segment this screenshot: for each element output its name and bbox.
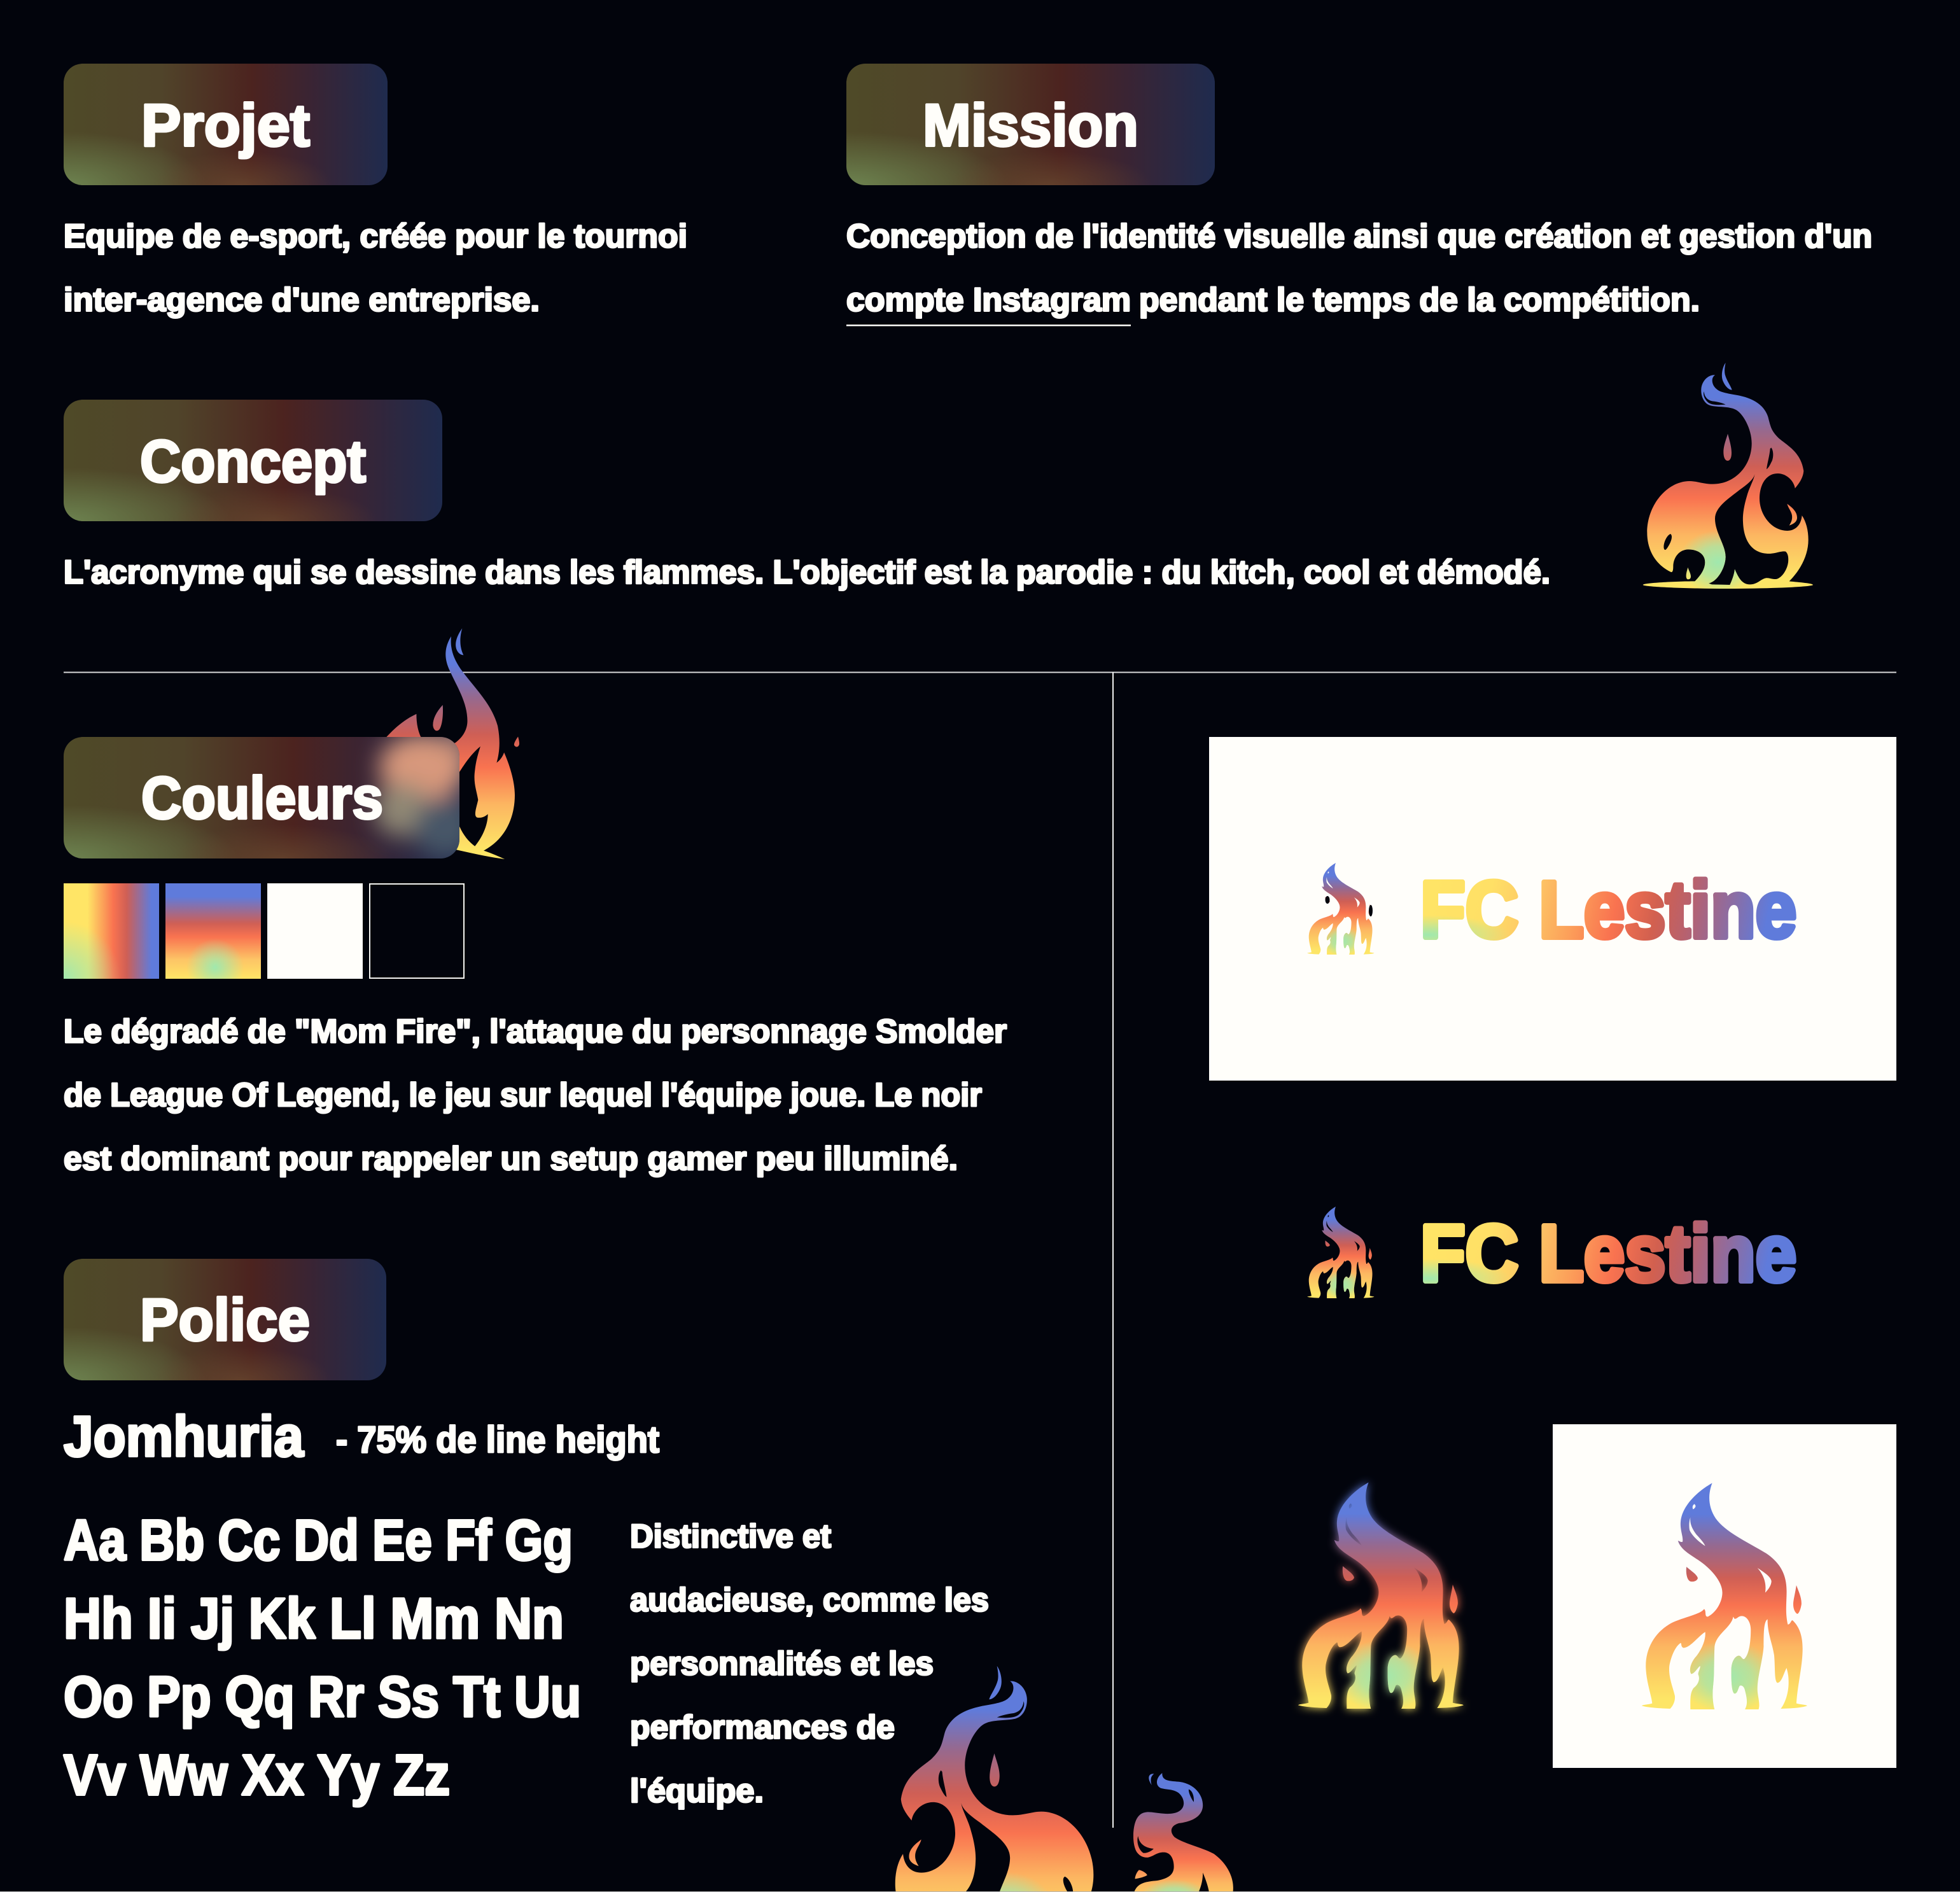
white background <box>1553 1424 1896 1768</box>
panel: logo on white <box>1209 737 1896 1081</box>
text block: couleurs description <box>64 1013 1007 1177</box>
swatch: vertical gradient <box>165 883 261 979</box>
panel: projet <box>64 64 687 318</box>
text block: police description: l'équipe. <box>630 1773 764 1810</box>
heading button: Mission <box>846 64 1215 185</box>
text block: couleurs description: est dominant pour rappeler un setup gamer peu illuminé. <box>64 1140 958 1177</box>
alphabet specimen <box>64 1509 581 1807</box>
alphabet specimen: Hh Ii Jj Kk Ll Mm Nn <box>64 1587 564 1651</box>
text block: couleurs description: de League Of Legend, le jeu sur lequel l'équipe joue. Le noir <box>64 1077 982 1114</box>
icon: small flame at bottom <box>1132 1771 1234 1892</box>
font note: - 75% de line height <box>336 1419 659 1461</box>
heading button: Projet: Projet <box>141 92 310 158</box>
swatch: horizontal gradient <box>64 883 159 979</box>
icon: logo flame <box>1306 863 1375 956</box>
text block: police description: performances de <box>630 1709 895 1746</box>
text block: mission description: Conception de l'identité visuelle ainsi que création et gestion d'un <box>846 218 1872 255</box>
text block: projet description: inter-agence d'une entreprise. <box>64 281 540 318</box>
panel: concept <box>64 361 1814 594</box>
text block: mission description <box>846 218 1872 326</box>
icon: glowing flame on dark <box>1296 1482 1466 1712</box>
colour swatches <box>64 883 464 979</box>
text block: couleurs description: Le dégradé de "Mom Fire", l'attaque du personnage Smolder <box>64 1013 1007 1050</box>
panel: mission <box>846 64 1872 326</box>
swatch: white <box>267 883 363 979</box>
heading button: Concept: Concept <box>140 428 366 494</box>
alphabet specimen: Aa Bb Cc Dd Ee Ff Gg <box>64 1509 573 1573</box>
text block: police description: personnalités et les <box>630 1646 934 1683</box>
white background <box>1209 737 1896 1081</box>
panel: flame on white <box>1553 1424 1896 1768</box>
icon: large flame at bottom <box>888 1665 1100 1892</box>
panel: police <box>64 1259 1234 1892</box>
icon: logo flame <box>1306 1207 1375 1300</box>
heading button: Couleurs (frosted glass): Couleurs <box>141 764 383 831</box>
text block: projet description: Equipe de e-sport, créée pour le tournoi <box>64 218 687 255</box>
bottom edge line <box>0 1891 1960 1892</box>
text block: concept description: L'acronyme qui se dessine dans les flammes. L'objectif est la parodie : du kitch, cool et démodé. <box>64 554 1550 591</box>
swatch: black <box>370 884 464 978</box>
heading button: Police <box>64 1259 386 1380</box>
text block: police description: Distinctive et <box>630 1518 831 1555</box>
icon: flame <box>1640 1482 1809 1713</box>
font name: Jomhuria <box>64 1405 304 1469</box>
heading button: Concept <box>64 400 442 521</box>
text block: mission description: compte Instagram <box>846 281 1131 318</box>
alphabet specimen: Vv Ww Xx Yy Zz <box>64 1744 450 1807</box>
alphabet specimen: Oo Pp Qq Rr Ss Tt Uu <box>64 1665 581 1729</box>
icon: dark flame drops <box>1325 896 1373 916</box>
text block: mission description: pendant le temps de la compétition. <box>1139 281 1700 318</box>
icon: concept flame monogram <box>1642 361 1814 594</box>
vertical divider <box>1112 672 1114 1828</box>
text block: police description <box>630 1518 989 1810</box>
heading button: Mission: Mission <box>923 92 1138 158</box>
horizontal divider <box>64 672 1896 673</box>
text block: projet description <box>64 218 687 318</box>
heading button: Police: Police <box>140 1286 310 1353</box>
heading button: Projet <box>64 64 388 185</box>
logo wordmark: FC Lestine <box>1420 1209 1796 1298</box>
text block: police description: audacieuse, comme les <box>630 1582 989 1619</box>
heading button: Couleurs (frosted glass) <box>64 737 459 858</box>
icon: flame behind couleurs heading <box>356 627 522 861</box>
panel: couleurs <box>64 627 1007 1177</box>
logo wordmark: FC Lestine <box>1420 865 1796 955</box>
panel: logo on dark <box>1306 1207 1796 1300</box>
